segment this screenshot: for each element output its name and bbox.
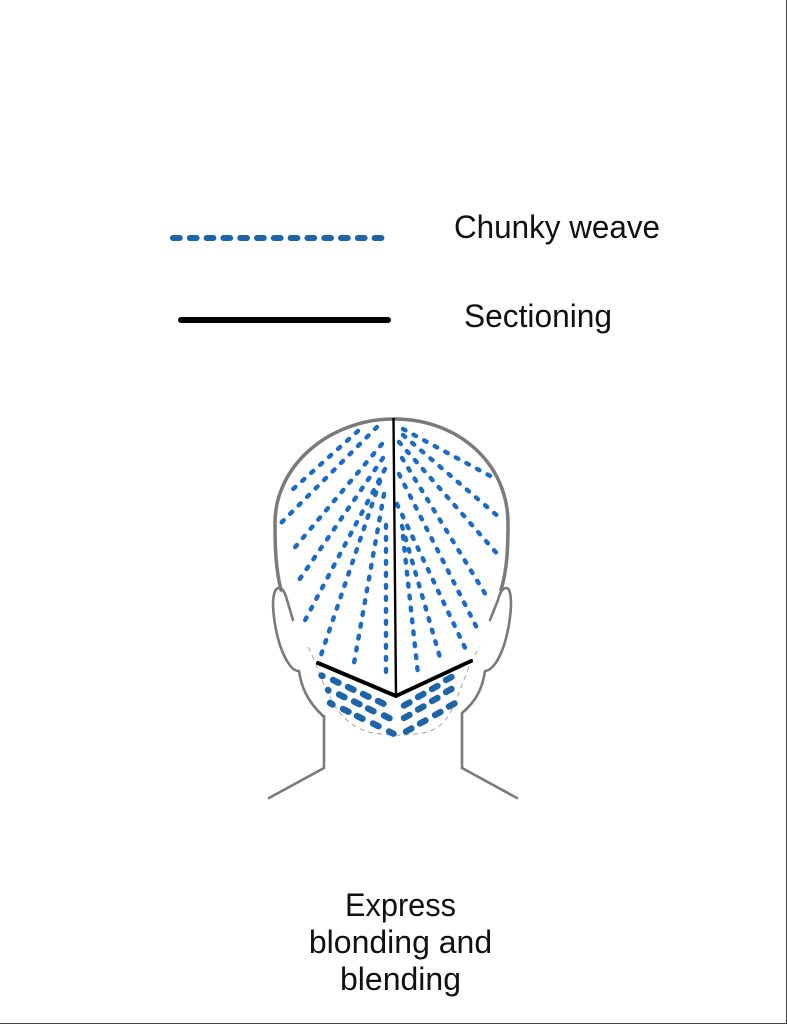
right ear and neck outline <box>462 588 517 798</box>
legend: chunky weave dashed line <box>173 235 384 241</box>
legend label: Chunky weave: Chunky weave <box>454 209 660 245</box>
lower chunky weave slices, left side <box>322 676 394 734</box>
diagram: back of head <box>269 418 517 798</box>
upper chunky weave lines, right side <box>397 429 500 674</box>
legend label: Sectioning: Sectioning <box>464 298 612 334</box>
caption: blonding and <box>309 924 492 960</box>
lower chunky weave slices, right side <box>404 677 454 732</box>
center sectioning line <box>394 418 396 696</box>
left ear and neck outline <box>269 588 324 798</box>
V-shaped sectioning line <box>318 661 471 696</box>
thin dashed hairline <box>308 647 480 735</box>
upper chunky weave lines, left side <box>278 427 386 678</box>
caption: Express <box>345 887 456 923</box>
legend: sectioning solid line <box>181 317 388 323</box>
caption: blending <box>340 961 461 997</box>
head outline <box>275 419 508 590</box>
